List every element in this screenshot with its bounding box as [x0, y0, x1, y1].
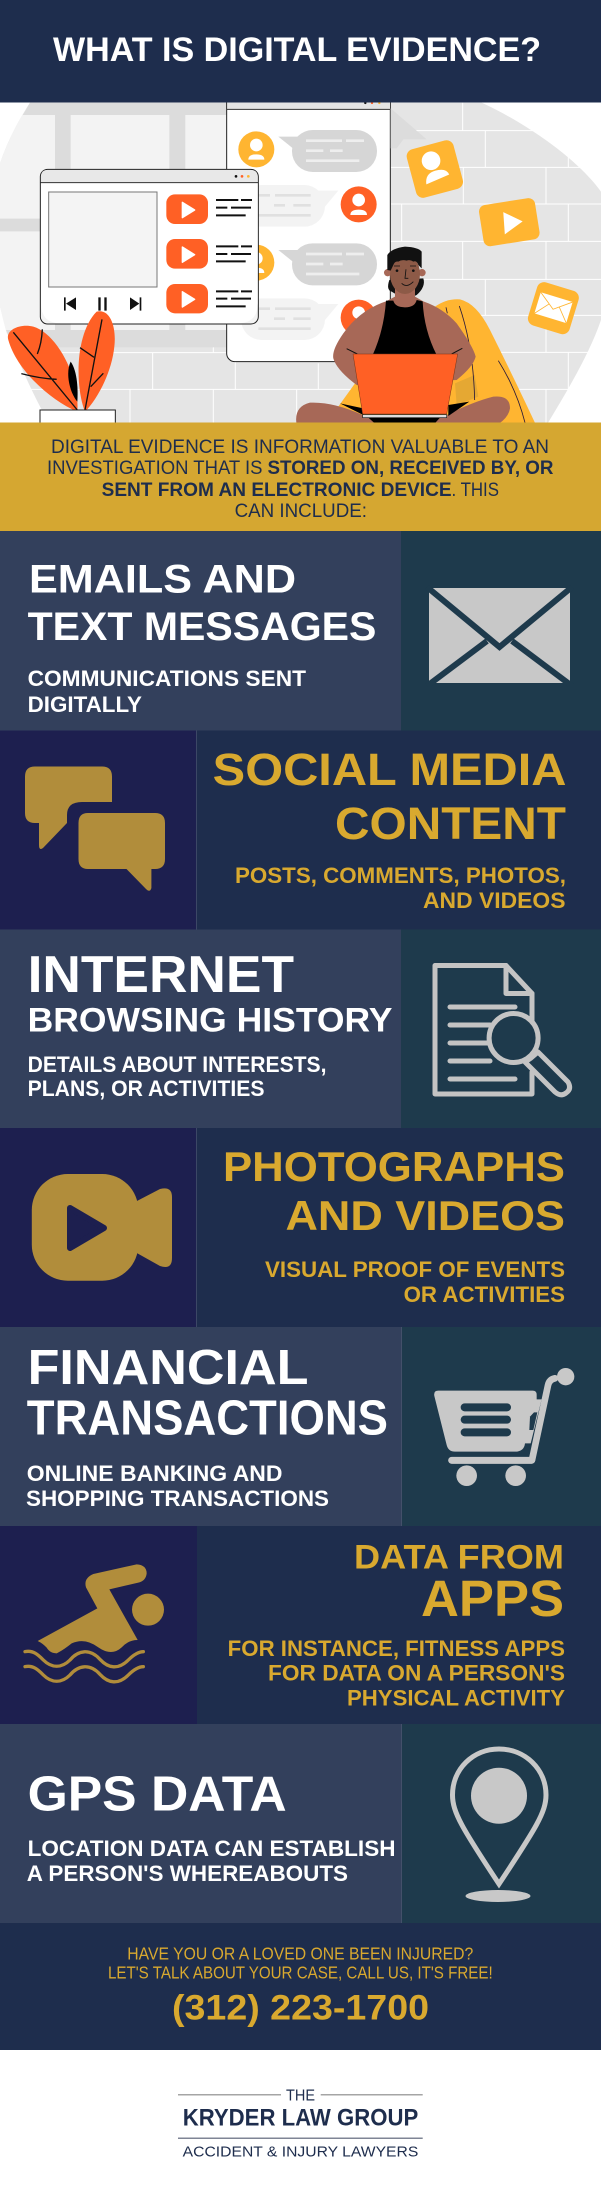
video player window	[40, 169, 258, 324]
logo: The Kryder Law Group: ACCIDENT & INJURY LAWYERS	[183, 2145, 418, 2161]
panel: internet browsing history	[0, 930, 601, 1128]
panel: social media content	[0, 730, 601, 930]
heading: CONTENT	[335, 798, 566, 849]
description: AND VIDEOS	[423, 888, 566, 913]
description	[28, 666, 307, 717]
logo: The Kryder Law Group: KRYDER LAW GROUP	[183, 2105, 418, 2132]
intro text	[47, 437, 554, 522]
description: FOR DATA ON A PERSON'S	[268, 1661, 565, 1686]
floating icons	[405, 139, 581, 336]
description: FOR INSTANCE, FITNESS APPS	[228, 1636, 565, 1661]
chat rows	[238, 130, 377, 340]
logo: The Kryder Law Group	[178, 2088, 423, 2161]
intro band	[0, 422, 601, 531]
heading	[223, 1143, 565, 1239]
logo: The Kryder Law Group: THE	[286, 2088, 315, 2105]
call to action text: HAVE YOU OR A LOVED ONE BEEN INJURED?	[127, 1943, 474, 1963]
call to action text	[108, 1943, 493, 1983]
description	[235, 863, 566, 913]
intro text: SENT FROM AN ELECTRONIC DEVICE	[102, 480, 452, 501]
description	[26, 1461, 329, 1511]
heading: GPS DATA	[28, 1767, 287, 1822]
description: PLANS, OR ACTIVITIES	[28, 1076, 264, 1101]
heading	[28, 557, 376, 649]
icon: swimmer	[25, 1564, 164, 1682]
description: DETAILS ABOUT INTERESTS,	[28, 1052, 326, 1077]
description: OR ACTIVITIES	[404, 1282, 565, 1307]
heading: INTERNET	[28, 945, 294, 1003]
panel: data from apps	[0, 1526, 601, 1724]
heading: EMAILS AND	[29, 557, 296, 601]
heading: APPS	[421, 1570, 564, 1627]
call to action text: LET'S TALK ABOUT YOUR CASE, CALL US, IT'S FREE!	[108, 1963, 493, 1983]
icon: location pin	[452, 1749, 546, 1902]
icon: document with magnifier	[435, 966, 570, 1095]
panel: financial transactions	[0, 1327, 601, 1526]
heading	[213, 744, 566, 849]
description: COMMUNICATIONS SENT	[28, 666, 307, 691]
heading	[27, 1341, 388, 1446]
intro text: INVESTIGATION THAT IS	[47, 458, 262, 479]
icon: speech bubbles	[25, 766, 165, 891]
panel: GPS data	[0, 1724, 601, 1923]
description: VISUAL PROOF OF EVENTS	[265, 1257, 565, 1282]
plant	[8, 311, 115, 427]
description	[228, 1636, 565, 1710]
heading: TRANSACTIONS	[27, 1392, 388, 1446]
heading: PHOTOGRAPHS	[223, 1143, 565, 1190]
heading	[354, 1538, 564, 1627]
description	[28, 1052, 326, 1101]
intro text: CAN INCLUDE:	[235, 501, 367, 522]
description: ONLINE BANKING AND	[27, 1461, 282, 1486]
heading	[28, 945, 393, 1040]
heading: DATA FROM	[354, 1538, 564, 1576]
wall shadow triangle	[391, 108, 427, 148]
heading: SOCIAL MEDIA	[213, 744, 566, 795]
icon: shopping cart	[434, 1368, 574, 1486]
intro text: DIGITAL EVIDENCE IS INFORMATION VALUABLE TO AN	[51, 437, 549, 458]
heading: AND VIDEOS	[286, 1192, 565, 1239]
description: DIGITALLY	[28, 692, 142, 717]
header: title band	[0, 0, 601, 102]
description	[265, 1257, 565, 1307]
description: A PERSON'S WHEREABOUTS	[27, 1861, 348, 1886]
heading: FINANCIAL	[28, 1341, 308, 1395]
heading: BROWSING HISTORY	[28, 1002, 393, 1040]
intro text: . THIS	[452, 480, 499, 501]
intro text: STORED ON, RECEIVED BY, OR	[268, 458, 554, 479]
description: PHYSICAL ACTIVITY	[347, 1686, 565, 1710]
chat window	[227, 93, 390, 362]
heading: TEXT MESSAGES	[28, 605, 376, 649]
description: POSTS, COMMENTS, PHOTOS,	[235, 863, 566, 888]
title: WHAT IS DIGITAL EVIDENCE?	[53, 31, 541, 69]
description: LOCATION DATA CAN ESTABLISH	[28, 1836, 395, 1861]
description: SHOPPING TRANSACTIONS	[26, 1486, 329, 1511]
footer: call to action	[0, 1923, 601, 2050]
wall background	[0, 103, 601, 425]
description	[27, 1836, 396, 1886]
panel: photographs and videos	[0, 1128, 601, 1327]
phone number: (312) 223-1700	[172, 1988, 429, 2027]
icon: envelope	[427, 587, 572, 686]
icon: video camera	[32, 1174, 172, 1281]
panel: emails and text messages	[0, 531, 601, 730]
person on beanbag with laptop	[296, 247, 536, 425]
illustration: person with laptop and digital content	[0, 93, 601, 427]
